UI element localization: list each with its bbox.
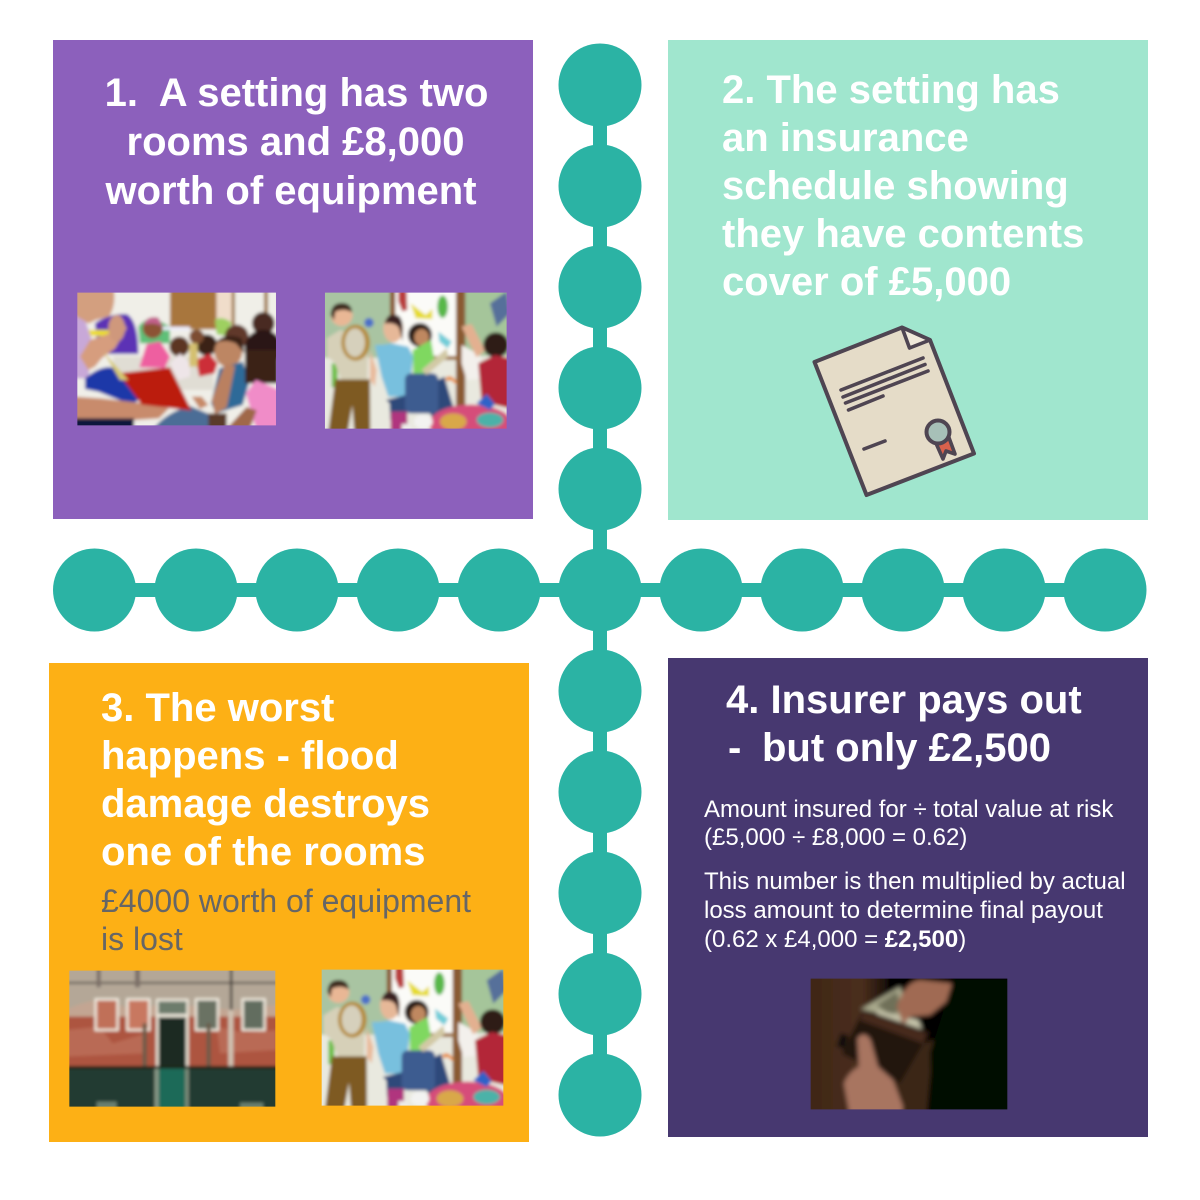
- heading: step 1: 1. A setting has two: [105, 71, 488, 115]
- heading: step 2: cover of £5,000: [722, 260, 1011, 304]
- photo: hand taking money from wallet: [810, 978, 1008, 1110]
- text: average clause formula: Amount insured for ÷ total value at risk: [704, 796, 1114, 823]
- heading: step 3: damage destroys: [101, 782, 430, 826]
- heading: step 4: -: [728, 726, 741, 770]
- photo: music session, room affected: [318, 966, 509, 1120]
- text: payout calculation: This number is then multiplied by actual: [704, 868, 1126, 895]
- text: equipment lost: £4000 worth of equipment: [101, 883, 471, 919]
- photo: flooded brick building: [69, 970, 276, 1107]
- heading: step 1: rooms and £8,000: [127, 120, 464, 164]
- text: payout calculation: (0.62 x £4,000 = £2,500): [704, 926, 966, 953]
- icon: insurance document with seal: [814, 328, 974, 495]
- heading: step 3: 3. The worst: [101, 686, 334, 730]
- heading: step 1: worth of equipment: [104, 169, 477, 213]
- text: payout calculation: loss amount to determine final payout: [704, 897, 1103, 924]
- heading: step 2: they have contents: [722, 212, 1084, 256]
- photo: music session in classroom: [322, 289, 512, 443]
- panel 1: purple setting panel: [53, 40, 533, 519]
- heading: step 2: 2. The setting has: [722, 68, 1060, 112]
- panel 3: orange flood damage panel: [49, 663, 529, 1142]
- photo: man reading to children: [73, 289, 282, 429]
- heading: step 3: happens - flood: [101, 734, 399, 778]
- text: equipment lost: is lost: [101, 921, 183, 957]
- panel 4: dark purple payout panel: [668, 658, 1148, 1137]
- heading: step 2: an insurance: [722, 116, 969, 160]
- heading: step 4: but only £2,500: [762, 726, 1051, 770]
- panel 2: mint insurance schedule panel: [668, 40, 1148, 520]
- text: average clause formula: (£5,000 ÷ £8,000 = 0.62): [704, 824, 967, 851]
- heading: step 2: schedule showing: [722, 164, 1069, 208]
- heading: step 4: 4. Insurer pays out: [726, 678, 1082, 722]
- heading: step 3: one of the rooms: [101, 830, 425, 874]
